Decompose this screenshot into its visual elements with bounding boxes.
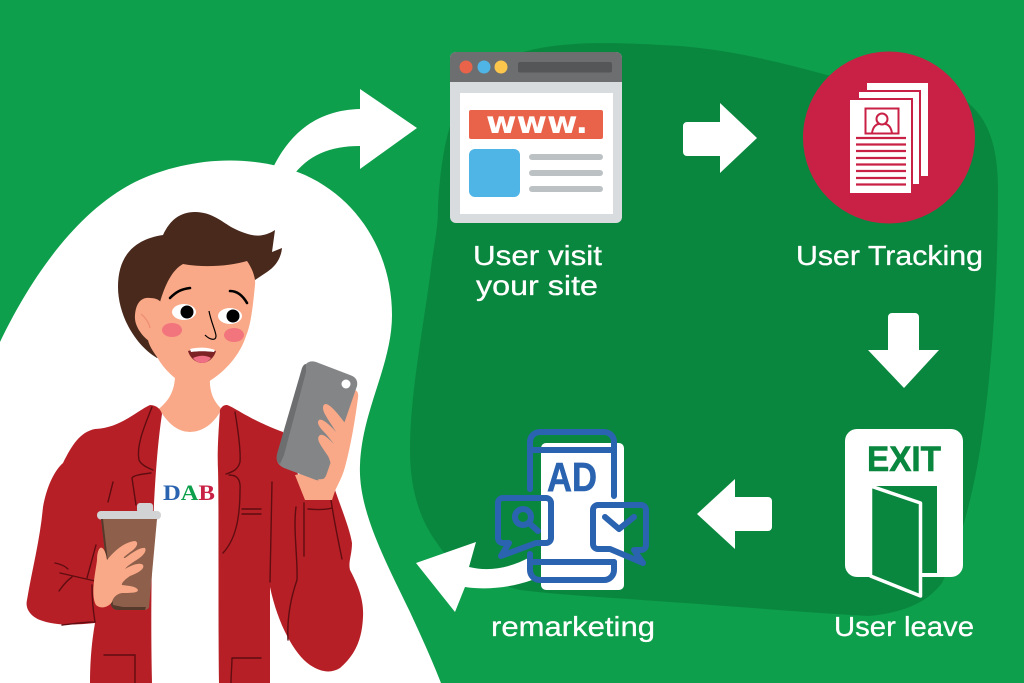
face — [148, 261, 255, 384]
arrow: left — [697, 479, 772, 549]
fingers on phone — [318, 404, 345, 490]
dark green blob panel — [410, 43, 998, 616]
label: user tracking: User Tracking — [796, 240, 983, 271]
label: user visit your site: your site — [476, 270, 598, 301]
arrow: person to website — [271, 89, 417, 177]
icon: browser window — [450, 52, 622, 223]
jacket right — [218, 405, 363, 683]
icon: mobile advertising — [498, 432, 646, 590]
door leaf — [870, 486, 920, 596]
hair — [118, 212, 282, 358]
exit text: EXIT — [867, 440, 941, 479]
label: user visit your site: User visit — [473, 240, 602, 271]
hand on cup — [93, 541, 146, 607]
shirt logo: DAB — [163, 480, 215, 505]
eyes — [172, 304, 196, 320]
neck and chest — [155, 370, 225, 432]
label: user visit your site — [473, 240, 602, 301]
AD text: AD — [547, 454, 597, 500]
icon: exit door — [845, 429, 963, 596]
label: remarketing: remarketing — [491, 611, 655, 642]
arrow: right — [683, 103, 757, 173]
icon: tracking documents in circle — [803, 52, 975, 224]
arrow: down — [868, 313, 939, 388]
nose — [205, 311, 216, 339]
person illustration — [27, 212, 363, 683]
cheeks — [162, 323, 182, 337]
hand behind phone — [295, 390, 358, 500]
mouth — [188, 349, 216, 363]
jacket left — [27, 405, 162, 683]
www text: www. — [486, 106, 588, 141]
phone — [277, 361, 357, 480]
eyebrows — [170, 288, 190, 298]
jacket fold lines — [55, 407, 342, 683]
white blob behind person — [0, 161, 441, 683]
coffee cup — [97, 503, 161, 610]
label: user leave: User leave — [834, 611, 974, 642]
arrow: remarketing back to person — [416, 542, 532, 612]
t-shirt — [150, 412, 220, 683]
ear — [135, 298, 165, 341]
